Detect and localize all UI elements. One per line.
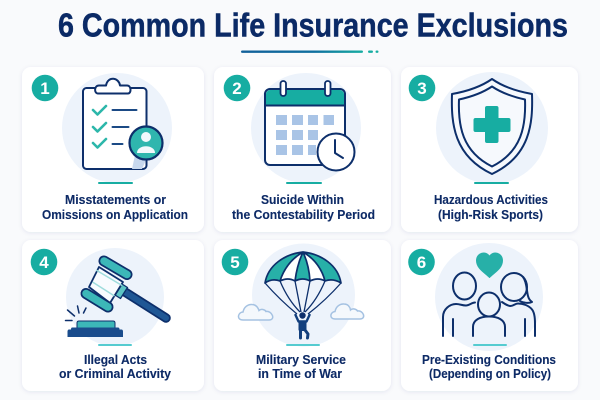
- caption: [256, 352, 346, 381]
- badge 5: 5: [230, 253, 240, 272]
- caption: Misstatements or: [65, 192, 166, 207]
- badge 4: [31, 249, 57, 275]
- accent rule: [98, 344, 132, 346]
- caption: [42, 192, 188, 222]
- icon: gavel: [66, 261, 166, 337]
- accent rule: [286, 344, 320, 346]
- panel: suicide within contestability period: [214, 67, 391, 232]
- badge 1: [32, 75, 58, 101]
- caption: the Contestability Period: [232, 207, 375, 222]
- caption: in Time of War: [258, 366, 342, 381]
- panel: military service: [214, 240, 391, 391]
- icon: clipboard with checklist and person: [83, 79, 162, 169]
- caption: [434, 192, 548, 222]
- caption: (Depending on Policy): [429, 366, 551, 381]
- caption: [422, 352, 556, 381]
- badge 1: 1: [40, 79, 50, 98]
- caption: or Criminal Activity: [59, 366, 172, 381]
- icon: calendar with clock: [265, 81, 354, 170]
- panel: pre-existing conditions: [401, 240, 578, 391]
- title underline: [241, 50, 378, 53]
- badge 6: [408, 249, 435, 275]
- accent rule: [286, 182, 322, 184]
- panel: misstatements or omissions: [22, 67, 204, 232]
- caption: Hazardous Activities: [434, 192, 548, 207]
- icon: shield with medical cross: [452, 79, 532, 174]
- panel: hazardous activities: [401, 67, 578, 232]
- badge 3: 3: [417, 79, 427, 98]
- badge 6: 6: [417, 253, 426, 272]
- badge 2: 2: [232, 79, 242, 98]
- badge 5: [222, 249, 248, 275]
- icon: parachutist: [238, 252, 364, 338]
- accent rule: [98, 182, 133, 184]
- caption: Omissions on Application: [42, 207, 188, 222]
- caption: Suicide Within: [261, 192, 344, 207]
- caption: [232, 192, 375, 222]
- badge 2: [224, 75, 250, 101]
- accent rule: [474, 182, 509, 184]
- accent rule: [473, 344, 507, 346]
- caption: (High-Risk Sports): [438, 207, 543, 222]
- caption: Military Service: [256, 352, 346, 367]
- panel: illegal acts: [22, 240, 204, 391]
- badge 3: [409, 75, 435, 101]
- caption: Illegal Acts: [84, 352, 147, 367]
- icon: family with heart: [443, 253, 535, 336]
- badge 4: 4: [39, 253, 49, 272]
- caption: [59, 352, 172, 381]
- caption: Pre-Existing Conditions: [422, 352, 556, 367]
